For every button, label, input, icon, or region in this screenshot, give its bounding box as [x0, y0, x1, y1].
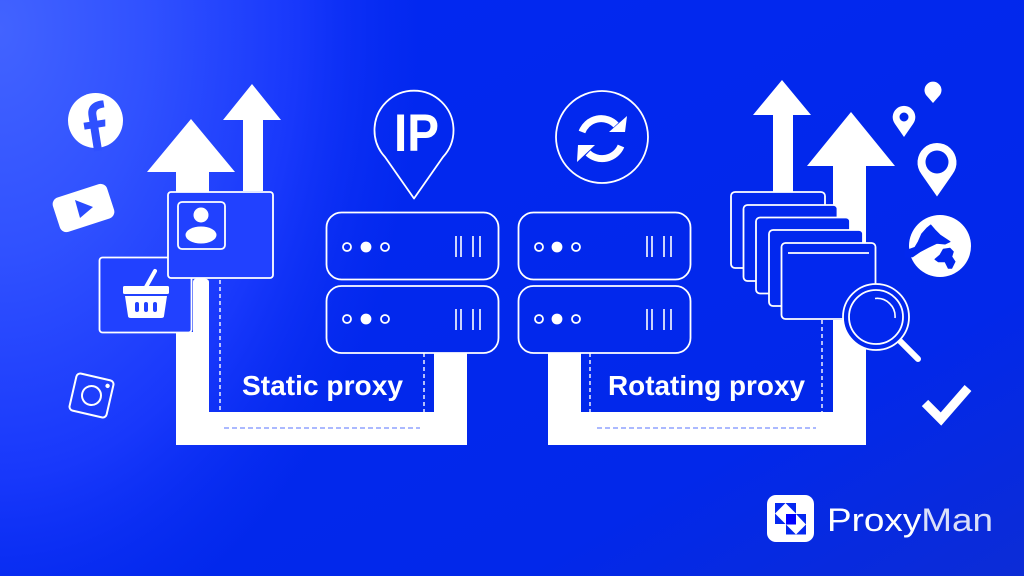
icon: IP location pin: IP — [394, 104, 439, 163]
panel: shopping basket card — [100, 258, 192, 332]
icon: globe — [905, 215, 971, 277]
icon: rotate circle — [556, 91, 648, 183]
icon: IP location pin — [374, 91, 454, 198]
arrow: right large — [807, 112, 895, 245]
arrow: left large — [147, 119, 235, 193]
arrow: left small — [223, 84, 281, 191]
icon: facebook — [68, 93, 123, 152]
label: Rotating proxy: Rotating proxy — [608, 370, 805, 401]
icon: instagram — [69, 373, 114, 418]
panel: stacked browser windows — [731, 192, 876, 319]
panel: profile card — [168, 192, 273, 278]
panel: right server top — [518, 212, 690, 280]
icon: large pin — [917, 143, 957, 196]
label: Static proxy: Static proxy — [242, 370, 403, 401]
icon: magnifier — [843, 284, 918, 359]
icon: check mark — [925, 388, 968, 419]
left U-shaped arrow track — [176, 278, 467, 445]
icon: user — [186, 208, 216, 244]
panel: left server bottom — [326, 286, 498, 353]
logo: ProxyMan: Proxy Man — [827, 502, 993, 538]
arrow: right small — [753, 80, 811, 192]
panel: left server top — [326, 212, 498, 280]
icon: medium pin — [893, 106, 915, 137]
icon: youtube — [51, 182, 116, 234]
panel: right server bottom — [518, 286, 690, 353]
icon: basket — [123, 271, 169, 318]
dashed guide lines — [220, 280, 822, 428]
icon: small pin — [925, 82, 942, 103]
right U-shaped arrow track — [548, 320, 866, 445]
logo: ProxyMan — [767, 495, 993, 542]
